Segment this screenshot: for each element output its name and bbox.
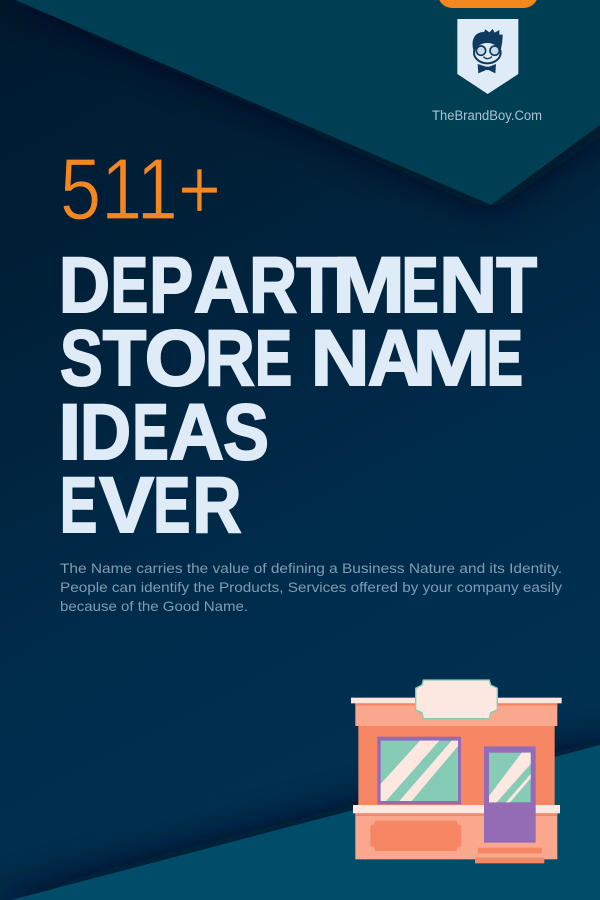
top angled panel bbox=[15, 0, 600, 205]
icon: storefront bbox=[351, 680, 562, 863]
title line 2: S bbox=[60, 313, 103, 402]
title line 1: E bbox=[402, 240, 439, 329]
title line 2: R bbox=[205, 313, 255, 402]
upper fascia bbox=[355, 703, 557, 726]
title line 1: T bbox=[496, 240, 537, 329]
title line 1: P bbox=[149, 240, 193, 329]
logo badge bbox=[457, 19, 518, 94]
orange tab bbox=[438, 0, 538, 8]
title line 1: R bbox=[249, 240, 297, 329]
title line 1: E bbox=[111, 240, 148, 329]
title line 1: D bbox=[59, 240, 110, 329]
title line 2: A bbox=[368, 313, 422, 402]
count 511+: 511+ bbox=[60, 141, 221, 238]
ledge bbox=[353, 805, 560, 813]
title bbox=[58, 240, 537, 549]
description line 3: because of the Good Name. bbox=[60, 598, 248, 614]
title line 1: T bbox=[296, 240, 337, 329]
title line 3: I bbox=[58, 387, 81, 476]
window bbox=[377, 737, 461, 804]
shadow above bottom panel bbox=[0, 738, 600, 900]
description bbox=[60, 560, 562, 614]
title line 1: A bbox=[194, 240, 249, 329]
title line 2: E bbox=[255, 313, 292, 402]
title line 2: M bbox=[412, 313, 491, 402]
title line 4: E bbox=[153, 460, 190, 549]
character head bbox=[473, 29, 503, 63]
title line 4: V bbox=[99, 460, 154, 549]
description line 2: People can identify the Products, Services offered by your company easily bbox=[60, 579, 562, 595]
title line 1: N bbox=[439, 240, 497, 329]
title line 4: E bbox=[60, 460, 97, 549]
title line 2: E bbox=[487, 313, 523, 402]
bow tie bbox=[478, 64, 496, 73]
upper step bbox=[478, 848, 542, 853]
lower step bbox=[475, 858, 544, 863]
shop sign bbox=[416, 680, 497, 719]
brand name: TheBrandBoy.Com bbox=[432, 108, 542, 123]
description line 1: The Name carries the value of defining a Business Nature and its Identity. bbox=[60, 560, 562, 576]
lower panel bbox=[370, 821, 461, 851]
bottom angled panel bbox=[11, 745, 600, 900]
shadow under top panel bbox=[0, 0, 600, 212]
lower wall bbox=[355, 813, 557, 859]
title line 3: E bbox=[132, 387, 169, 476]
title line 4: R bbox=[192, 460, 242, 549]
roof cornice bbox=[351, 698, 562, 703]
badge shield bbox=[457, 19, 518, 94]
title line 3: D bbox=[80, 387, 131, 476]
title line 2: T bbox=[103, 313, 146, 402]
title line 1: M bbox=[332, 240, 405, 329]
title line 3: A bbox=[169, 387, 224, 476]
title line 2: N bbox=[311, 313, 370, 402]
title line 2: O bbox=[145, 313, 207, 402]
wall bbox=[358, 726, 555, 806]
title line 3: S bbox=[223, 387, 269, 476]
door bbox=[484, 746, 536, 843]
